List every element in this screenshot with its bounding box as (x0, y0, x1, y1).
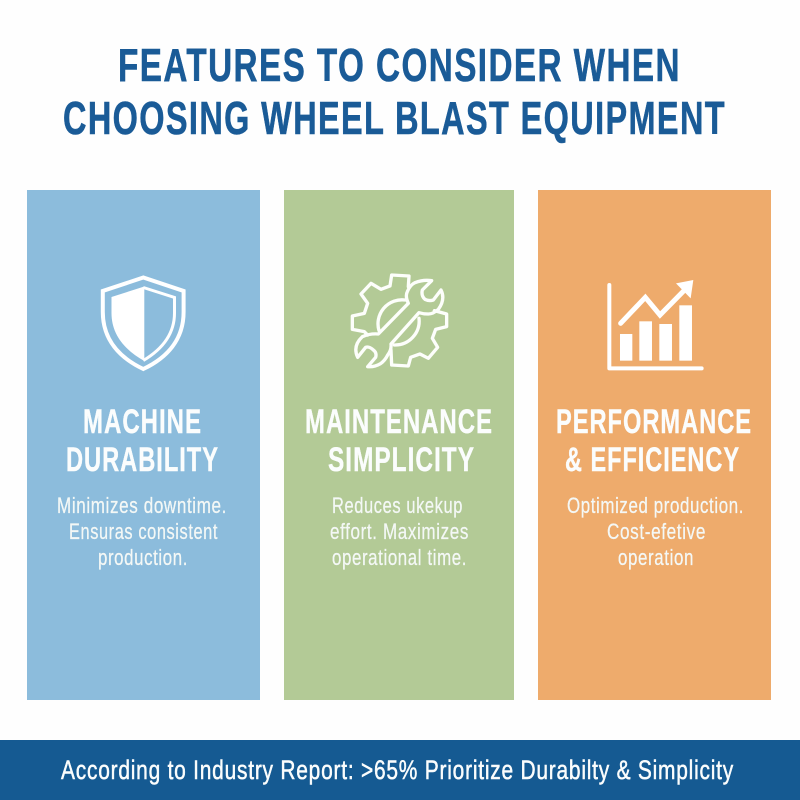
text: machine durability description: Minimizes downtime. (57, 493, 227, 518)
panel: machine durability (27, 190, 260, 700)
heading: machine durability: DURABILITY (66, 441, 219, 479)
icon: shield (103, 278, 184, 369)
panel: performance and efficiency (538, 190, 771, 700)
text: maintenance simplicity description: effort. Maximizes (330, 519, 469, 544)
text: performance and efficiency description (567, 493, 744, 570)
text: performance and efficiency description: Cost-efetive (607, 519, 706, 544)
text: maintenance simplicity description (330, 493, 469, 570)
text: performance and efficiency description: operation (618, 545, 694, 570)
heading: maintenance simplicity (305, 403, 493, 479)
text: machine durability description: production. (98, 545, 188, 570)
heading: maintenance simplicity: SIMPLICITY (328, 441, 475, 479)
text: maintenance simplicity description: Reduces ukekup (332, 493, 463, 518)
icon: gear and wrench (352, 275, 447, 367)
text: machine durability description: Ensuras consistent (69, 519, 218, 544)
panel: maintenance simplicity (284, 190, 514, 700)
heading: performance and efficiency (556, 403, 752, 479)
icon: growth chart (609, 280, 702, 368)
footer banner (0, 740, 800, 800)
heading: machine durability (66, 403, 219, 479)
text: performance and efficiency description: Optimized production. (567, 493, 744, 518)
heading: machine durability: MACHINE (83, 403, 202, 441)
title (63, 39, 726, 144)
heading: maintenance simplicity: MAINTENANCE (305, 403, 493, 441)
text: maintenance simplicity description: operational time. (332, 545, 467, 570)
text: machine durability description (57, 493, 227, 570)
